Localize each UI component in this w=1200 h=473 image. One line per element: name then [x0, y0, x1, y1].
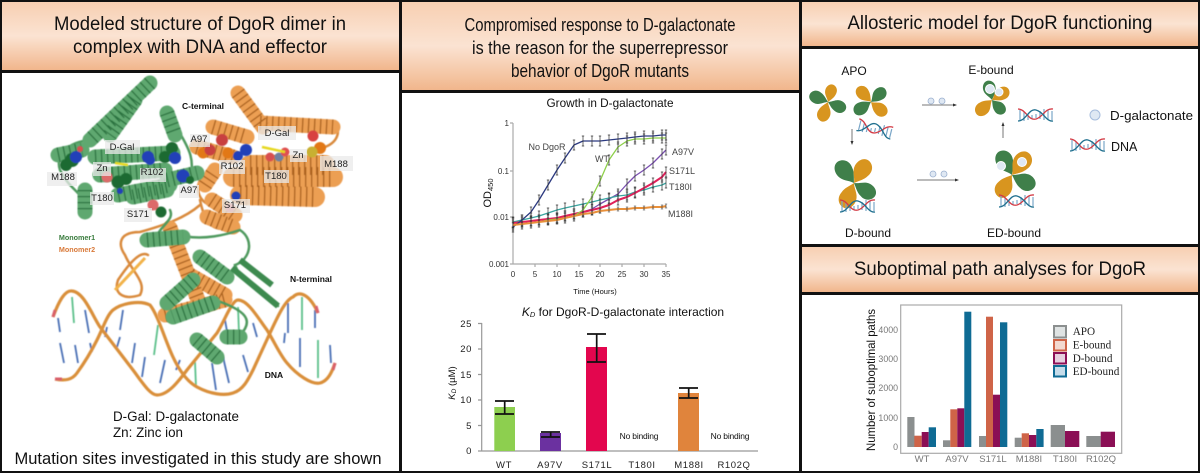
heading: compromised response: behavior of DgoR mutants — [511, 60, 689, 81]
panel: suboptimal path analyses — [802, 247, 1198, 465]
DNA double helix — [53, 291, 335, 395]
KD bar chart: M188I — [674, 460, 704, 471]
heading: suboptimal paths — [802, 247, 1198, 292]
growth chart: 0.1 — [498, 167, 510, 176]
state: APO — [807, 64, 893, 139]
growth chart — [482, 96, 695, 296]
site labels: S171 — [127, 209, 149, 220]
heading: suboptimal paths: Suboptimal path analyses for DgoR — [854, 259, 1146, 280]
heading: modeled structure: complex with DNA and effector — [73, 37, 328, 58]
KD bar chart: 20 — [460, 344, 472, 355]
site labels: A97 — [181, 185, 197, 196]
growth chart: 0.001 — [489, 260, 510, 269]
growth chart: WT — [595, 154, 609, 164]
legend text — [14, 409, 382, 468]
KD bar chart: D — [530, 310, 536, 319]
heading: compromised response: Compromised response to D-galactonate — [464, 14, 736, 35]
legend: molecules — [1070, 109, 1193, 154]
growth chart: 30 — [640, 270, 649, 279]
state: E-bound: E-bound — [968, 63, 1014, 77]
state: APO: APO — [841, 64, 867, 78]
legend text: Zn: Zinc ion — [113, 425, 183, 440]
chart legend: ED-bound — [1073, 366, 1120, 378]
KD bar chart: 5 — [466, 421, 472, 432]
site labels: R102 — [221, 161, 243, 172]
transition arrows — [850, 98, 1004, 182]
structure annotations: N-terminal — [290, 274, 332, 284]
KD bar chart: 25 — [460, 319, 472, 330]
KD bar chart: K — [447, 393, 458, 400]
mutation site spheres — [60, 130, 326, 218]
growth chart: M188I — [668, 209, 693, 219]
chart legend: D-bound — [1073, 353, 1113, 365]
heading: allosteric model — [802, 2, 1198, 46]
suboptimal bar chart: M188I — [1016, 454, 1042, 465]
KD bar chart: No binding — [711, 431, 750, 441]
KD bar chart: R102Q — [717, 460, 751, 471]
site labels: D-Gal — [110, 142, 134, 153]
growth chart: 10 — [553, 270, 562, 279]
panel: allosteric model — [802, 2, 1198, 240]
growth chart: 15 — [575, 270, 584, 279]
suboptimal bar chart: 4000 — [878, 325, 898, 335]
growth chart: A97V — [672, 147, 694, 157]
panel: compromised response — [402, 2, 799, 471]
structure annotations: DNA — [265, 370, 283, 380]
suboptimal bar chart: T180I — [1053, 454, 1077, 465]
state: ED-bound — [987, 147, 1041, 240]
protein: monomer 1 green — [58, 83, 278, 357]
KD bar chart: K — [522, 305, 531, 319]
growth chart: 35 — [662, 270, 671, 279]
growth chart: 0.01 — [493, 213, 510, 222]
growth chart: 5 — [533, 270, 538, 279]
structure annotations: Monomer2 — [59, 245, 95, 254]
legend text: D-Gal: D-galactonate — [113, 409, 239, 424]
heading: compromised response — [402, 2, 799, 90]
growth chart: 450 — [486, 178, 495, 191]
legend: molecules: D-galactonate — [1110, 109, 1193, 123]
growth chart: T180I — [669, 182, 692, 192]
state: E-bound — [968, 63, 1053, 121]
site labels: D-Gal — [265, 128, 289, 139]
heading: compromised response: is the reason for the superrepressor — [472, 37, 728, 58]
suboptimal bar chart: 1000 — [878, 413, 898, 423]
site labels — [47, 126, 353, 222]
site labels: M188 — [324, 159, 348, 170]
heading: allosteric model: Allosteric model for DgoR functioning — [848, 13, 1152, 34]
KD bar chart: (µM) — [447, 366, 458, 389]
heading: modeled structure: Modeled structure of DgoR dimer in — [54, 14, 346, 35]
site labels: T180 — [265, 171, 287, 182]
chart legend: APO — [1073, 326, 1095, 338]
site labels: Zn — [292, 150, 304, 161]
KD bar chart: A97V — [537, 460, 563, 471]
KD bar chart — [447, 305, 758, 471]
KD bar chart: No binding — [620, 431, 659, 441]
suboptimal bar chart: Number of suboptimal paths — [864, 309, 878, 451]
site labels: S171 — [224, 200, 246, 211]
suboptimal bar chart: S171L — [979, 454, 1007, 465]
chart legend: E-bound — [1073, 340, 1112, 352]
growth chart: 20 — [596, 270, 605, 279]
growth chart: OD — [482, 191, 494, 208]
suboptimal bar chart: A97V — [945, 454, 969, 465]
state: D-bound: D-bound — [845, 226, 891, 240]
growth chart: 25 — [618, 270, 627, 279]
suboptimal bar chart: 3000 — [878, 354, 898, 364]
site labels: A97 — [191, 134, 207, 145]
growth chart: Growth in D-galactonate — [546, 96, 674, 110]
structure annotations: Monomer1 — [59, 233, 95, 242]
site labels: M188 — [51, 172, 75, 183]
KD bar chart: 15 — [460, 370, 472, 381]
KD bar chart: T180I — [628, 460, 656, 471]
state: ED-bound: ED-bound — [987, 226, 1041, 240]
panel: modeled structure — [2, 2, 399, 468]
suboptimal bar chart: 0 — [893, 442, 898, 452]
structure annotations: C-terminal — [182, 101, 224, 111]
site labels: T180 — [91, 193, 113, 204]
growth chart: S171L — [669, 166, 695, 176]
suboptimal bar chart: WT — [915, 454, 930, 465]
protein: monomer 2 orange — [115, 93, 338, 315]
growth chart: Time (Hours) — [573, 287, 617, 296]
growth chart: 0 — [511, 270, 516, 279]
KD bar chart: S171L — [582, 460, 612, 471]
state: D-bound — [831, 156, 891, 240]
KD bar chart: 10 — [460, 395, 472, 406]
growth chart: No DgoR — [528, 142, 566, 152]
suboptimal bar chart: R102Q — [1086, 454, 1116, 465]
growth chart: 1 — [505, 119, 510, 128]
KD bar chart: for DgoR-D-galactonate interaction — [535, 305, 724, 319]
chart legend — [1054, 326, 1120, 378]
site labels: Zn — [96, 163, 108, 174]
suboptimal bar chart: 2000 — [878, 383, 898, 393]
KD bar chart: D — [451, 388, 458, 393]
legend text: Mutation sites investigated in this study are shown — [14, 450, 382, 468]
legend: molecules: DNA — [1111, 140, 1138, 154]
suboptimal bar chart — [864, 305, 1122, 465]
KD bar chart: WT — [496, 460, 512, 471]
KD bar chart: 0 — [466, 446, 472, 457]
heading: modeled structure — [2, 2, 399, 70]
site labels: R102 — [141, 167, 163, 178]
structure annotations — [59, 101, 332, 380]
